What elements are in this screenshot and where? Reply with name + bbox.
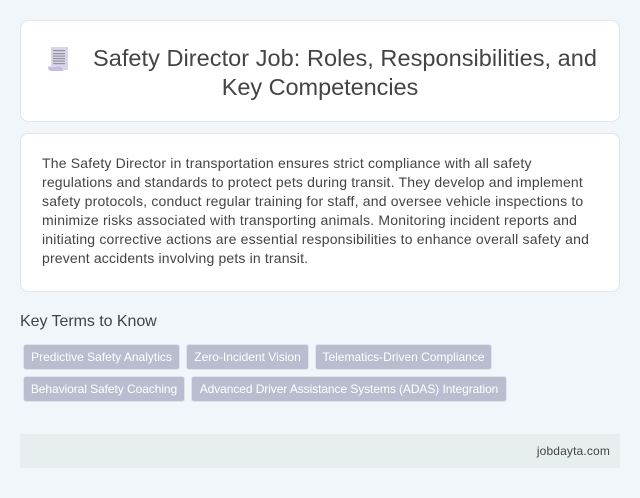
summary text: minimize risks associated with transporting animals. Monitoring incident reports and (42, 212, 577, 228)
tag list (23, 344, 507, 402)
tag: Behavioral Safety Coaching (31, 382, 177, 396)
tag (23, 376, 185, 402)
tag (191, 376, 507, 402)
tag: Advanced Driver Assistance Systems (ADAS) Integration (200, 382, 498, 396)
summary text: safety protocols, conduct regular training for staff, and oversee vehicle inspections to (42, 193, 583, 209)
icon: document scroll (48, 47, 68, 71)
tag: Zero-Incident Vision (194, 350, 301, 364)
summary text: initiating corrective actions are essential responsibilities to enhance overall safety and (42, 231, 589, 247)
tag (315, 344, 492, 370)
heading: key terms: Key Terms to Know (20, 313, 157, 330)
tag (23, 344, 180, 370)
footer source: jobdayta.com (537, 444, 610, 458)
title: Safety Director Job: Roles, Responsibilities, and (93, 45, 597, 71)
title: Key Competencies (222, 74, 418, 100)
tag (186, 344, 309, 370)
footer bar (20, 434, 620, 468)
summary text: prevent accidents involving pets in transit. (42, 250, 308, 266)
summary panel (20, 133, 620, 292)
summary text: regulations and standards to protect pets during transit. They develop and implement (42, 174, 583, 190)
tag: Predictive Safety Analytics (31, 350, 172, 364)
header panel (20, 20, 620, 122)
title (93, 45, 597, 100)
summary text: The Safety Director in transportation ensures strict compliance with all safety (42, 155, 532, 171)
summary text (42, 155, 589, 266)
tag: Telematics-Driven Compliance (322, 350, 485, 364)
